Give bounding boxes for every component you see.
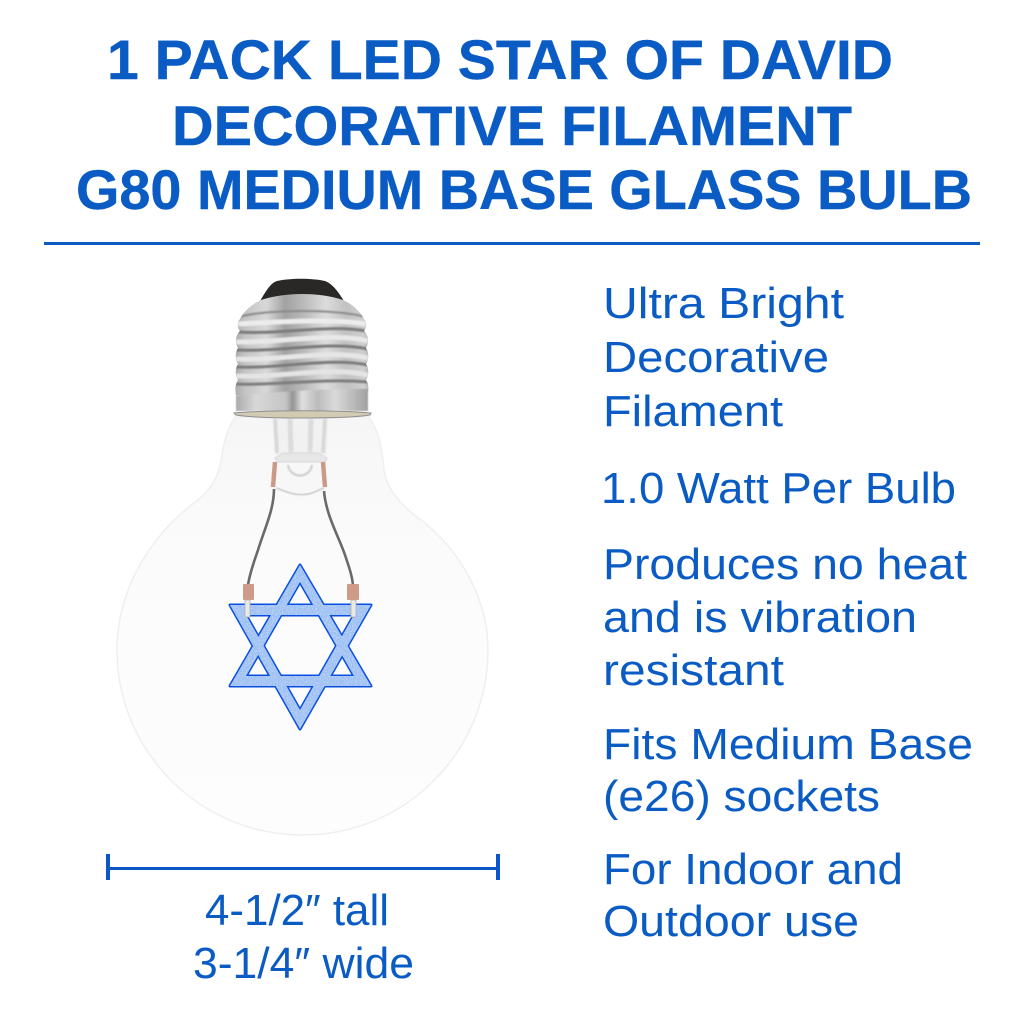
title: 1 PACK LED STAR OF DAVID xyxy=(107,28,893,91)
glass envelope xyxy=(117,417,488,835)
title: G80 MEDIUM BASE GLASS BULB xyxy=(76,158,972,221)
dimension line xyxy=(106,854,500,880)
feature: no heat: Produces no heat xyxy=(603,540,967,589)
feature: socket fit xyxy=(603,720,973,821)
star filament xyxy=(230,565,371,729)
black contact tip xyxy=(260,279,344,301)
feature: indoor outdoor: Outdoor use xyxy=(603,897,859,946)
dimension labels: 3-1/4″ wide xyxy=(193,939,414,988)
feature: socket fit: (e26) sockets xyxy=(603,772,880,821)
feature: indoor outdoor: For Indoor and xyxy=(603,845,903,894)
bulb illustration xyxy=(117,279,488,835)
feature: ultra bright xyxy=(603,279,844,436)
title xyxy=(76,28,972,221)
screw base xyxy=(230,290,375,418)
feature: no heat: and is vibration xyxy=(603,593,917,642)
right filament clip xyxy=(347,584,359,617)
title: DECORATIVE FILAMENT xyxy=(172,94,852,157)
left filament clip xyxy=(243,584,254,617)
copper leads xyxy=(273,462,325,487)
feature: ultra bright: Filament xyxy=(603,387,783,436)
feature: ultra bright: Ultra Bright xyxy=(603,279,844,328)
feature: ultra bright: Decorative xyxy=(603,333,829,382)
feature: no heat: resistant xyxy=(603,646,784,695)
feature: socket fit: Fits Medium Base xyxy=(603,720,973,769)
support wires xyxy=(248,489,353,585)
feature: no heat xyxy=(603,540,967,695)
dimension labels xyxy=(193,886,414,988)
feature: wattage: 1.0 Watt Per Bulb xyxy=(601,464,956,513)
dimension labels: 4-1/2″ tall xyxy=(205,886,389,935)
collar xyxy=(236,389,368,411)
rim xyxy=(234,411,371,418)
feature: indoor outdoor xyxy=(603,845,903,946)
glass stem xyxy=(273,419,328,494)
thread shading xyxy=(236,311,368,384)
